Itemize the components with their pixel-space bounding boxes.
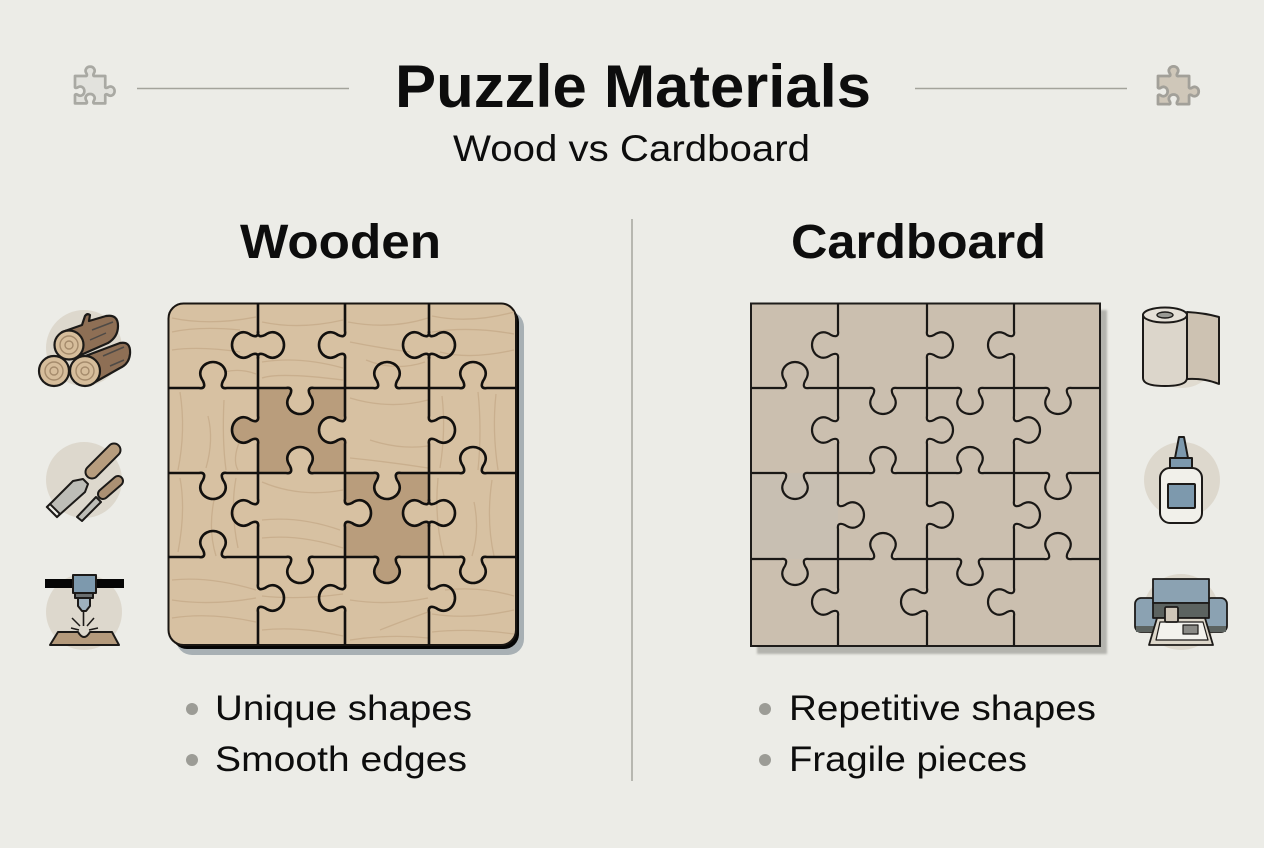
cardboard feature list: Repetitive shapes	[789, 689, 1096, 728]
subtitle: Wood vs Cardboard	[453, 128, 810, 169]
wooden feature list	[186, 689, 472, 779]
puzzle cut lines	[751, 303, 1100, 646]
wood grain	[172, 312, 514, 640]
divider line: header right	[915, 88, 1127, 90]
icon: laser cutter	[45, 574, 124, 650]
icon: paper roll	[1143, 308, 1219, 388]
center divider	[631, 219, 633, 781]
puzzle cut lines	[168, 303, 516, 645]
wooden puzzle board	[168, 303, 524, 655]
dark wooden pieces	[232, 388, 429, 583]
panel: cardboard	[751, 216, 1227, 779]
icon: logs	[39, 310, 130, 386]
icon: grey puzzle piece left	[75, 67, 115, 103]
cardboard puzzle board	[751, 303, 1107, 654]
icon: glue bottle	[1144, 437, 1220, 523]
icon: chisels	[46, 442, 122, 521]
cardboard feature list: Fragile pieces	[789, 740, 1027, 779]
panel: wooden	[39, 216, 524, 779]
icon: tan puzzle piece right	[1158, 66, 1199, 104]
cardboard feature list	[759, 689, 1096, 779]
icon: cutting machine	[1135, 574, 1227, 650]
heading: wooden: Wooden	[240, 216, 441, 269]
divider line: header left	[137, 88, 349, 90]
heading: cardboard: Cardboard	[791, 216, 1046, 269]
wooden feature list: Smooth edges	[215, 740, 467, 779]
wooden feature list: Unique shapes	[215, 689, 472, 728]
title: Puzzle Materials	[395, 53, 871, 120]
header: title and subtitle	[395, 53, 871, 169]
